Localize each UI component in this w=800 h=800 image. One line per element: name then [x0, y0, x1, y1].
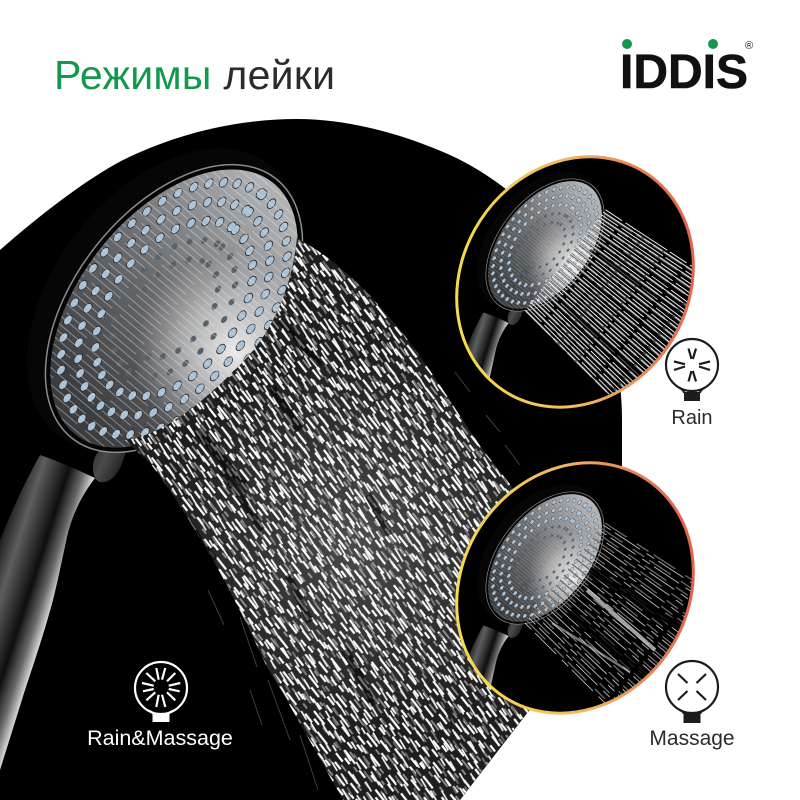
logo: IDDIS: IDDIS [620, 46, 748, 99]
logo: IDDIS: ® [745, 40, 753, 52]
icon: massage [666, 661, 718, 723]
inset photo: shower head rain [452, 148, 629, 457]
panel: black backdrop shape [0, 119, 622, 800]
icon: rain [666, 339, 718, 401]
water stream [125, 238, 530, 800]
inset ring [409, 111, 741, 453]
inset water: massage jets [524, 522, 692, 703]
photo: large shower head [0, 97, 357, 770]
label: rain and massage: Rain&Massage [87, 726, 233, 750]
icon: rain and massage [135, 662, 187, 722]
inset water: rain jets [524, 209, 692, 395]
panel: massage mode inset [455, 461, 695, 715]
title: Режимы лейки [54, 52, 335, 98]
label: rain: Rain [671, 407, 713, 429]
label: massage: Massage [649, 727, 735, 750]
panel: rain mode inset [455, 155, 695, 409]
inset photo: shower head massage [452, 461, 629, 770]
stray water drops [208, 372, 520, 790]
inset ring [409, 417, 741, 759]
